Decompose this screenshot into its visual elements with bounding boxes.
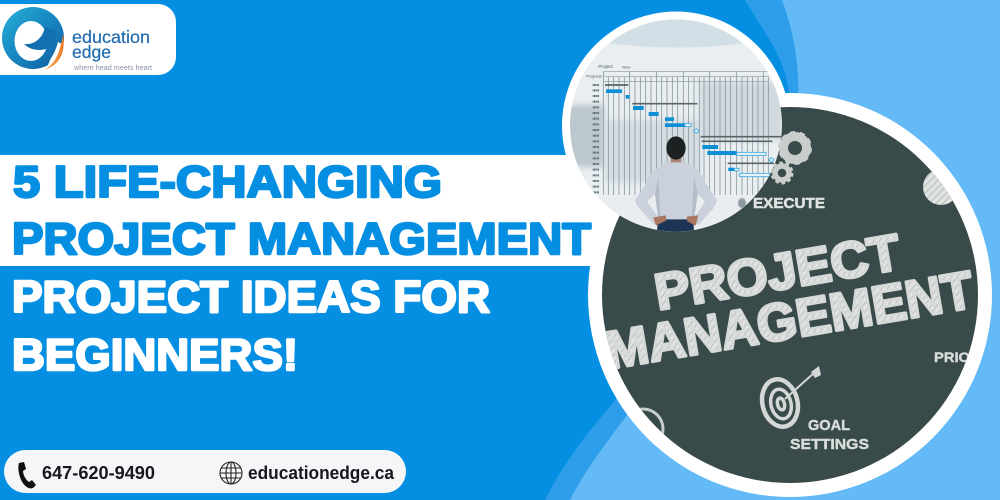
icon: ring fragment: [640, 408, 664, 434]
gantt chart: [586, 64, 782, 195]
title: [12, 158, 591, 380]
heading: project: PROJECT: [650, 223, 904, 321]
logo tagline: where head meets heart: [73, 65, 152, 72]
label: priority fragment: PRIO: [934, 349, 970, 365]
logo card: [0, 4, 176, 75]
gantt labels: [586, 64, 630, 78]
contact bar: [4, 450, 406, 493]
neck: [671, 157, 681, 162]
title line 4: BEGINNERS!: [12, 331, 298, 380]
summary bars: [605, 85, 782, 163]
logo mark: e swirl: [2, 7, 70, 75]
chalkboard picture: [590, 100, 990, 490]
progress column: [593, 85, 599, 192]
label: goal: GOAL: [808, 417, 850, 434]
label: settings: SETTINGS: [790, 437, 869, 453]
task bars: [606, 89, 737, 171]
blurred interior right: [700, 82, 782, 140]
contact pill: [4, 450, 406, 493]
website: educationedge.ca: [248, 463, 395, 483]
gantt grid: [603, 72, 768, 195]
logo background: [0, 4, 176, 75]
background: mid blue wave: [545, 0, 1000, 500]
background: light blue wave: [570, 0, 1000, 500]
trousers: [657, 219, 694, 232]
chalkboard circle: [588, 93, 992, 497]
task bars unfilled: [685, 124, 774, 177]
label: execute: EXECUTE: [753, 195, 825, 212]
gantt labels: Project: [598, 64, 614, 69]
blurred interior centre: [605, 120, 700, 182]
title line 2: PROJECT MANAGEMENT: [12, 215, 591, 264]
shirt and arms: [635, 162, 717, 225]
icon: globe: [220, 462, 242, 484]
chalkboard white ring: [588, 93, 992, 497]
office background: [572, 43, 782, 232]
logo wordmark: education: education: [72, 27, 150, 47]
head: [666, 136, 686, 160]
phone number: 647-620-9490: [42, 463, 155, 483]
photo: man viewing gantt chart: [570, 20, 782, 232]
gantt labels: Progress: [586, 73, 602, 78]
icon: phone: [18, 462, 36, 488]
ceiling: [609, 20, 743, 48]
hands: [653, 215, 698, 226]
title line 1: 5 LIFE-CHANGING: [13, 158, 442, 207]
heading: management: MANAGEMENT: [601, 261, 978, 381]
blurred interior left: [566, 105, 604, 167]
gantt labels: View: [622, 65, 630, 70]
white title band: [0, 155, 640, 266]
shirt shading: [655, 177, 698, 219]
man from behind: [635, 136, 717, 233]
icon: small gear: [772, 163, 792, 183]
icon: large gear: [780, 133, 810, 163]
board surface: [590, 100, 990, 490]
icon: chalk disc: [923, 172, 952, 205]
photo white ring: [562, 12, 790, 240]
logo wordmark: edge: edge: [72, 42, 111, 62]
icon: target and arrow: [757, 366, 821, 431]
floor: [620, 202, 750, 232]
distant figure: [738, 198, 746, 208]
title line 3: PROJECT IDEAS FOR: [12, 273, 490, 322]
